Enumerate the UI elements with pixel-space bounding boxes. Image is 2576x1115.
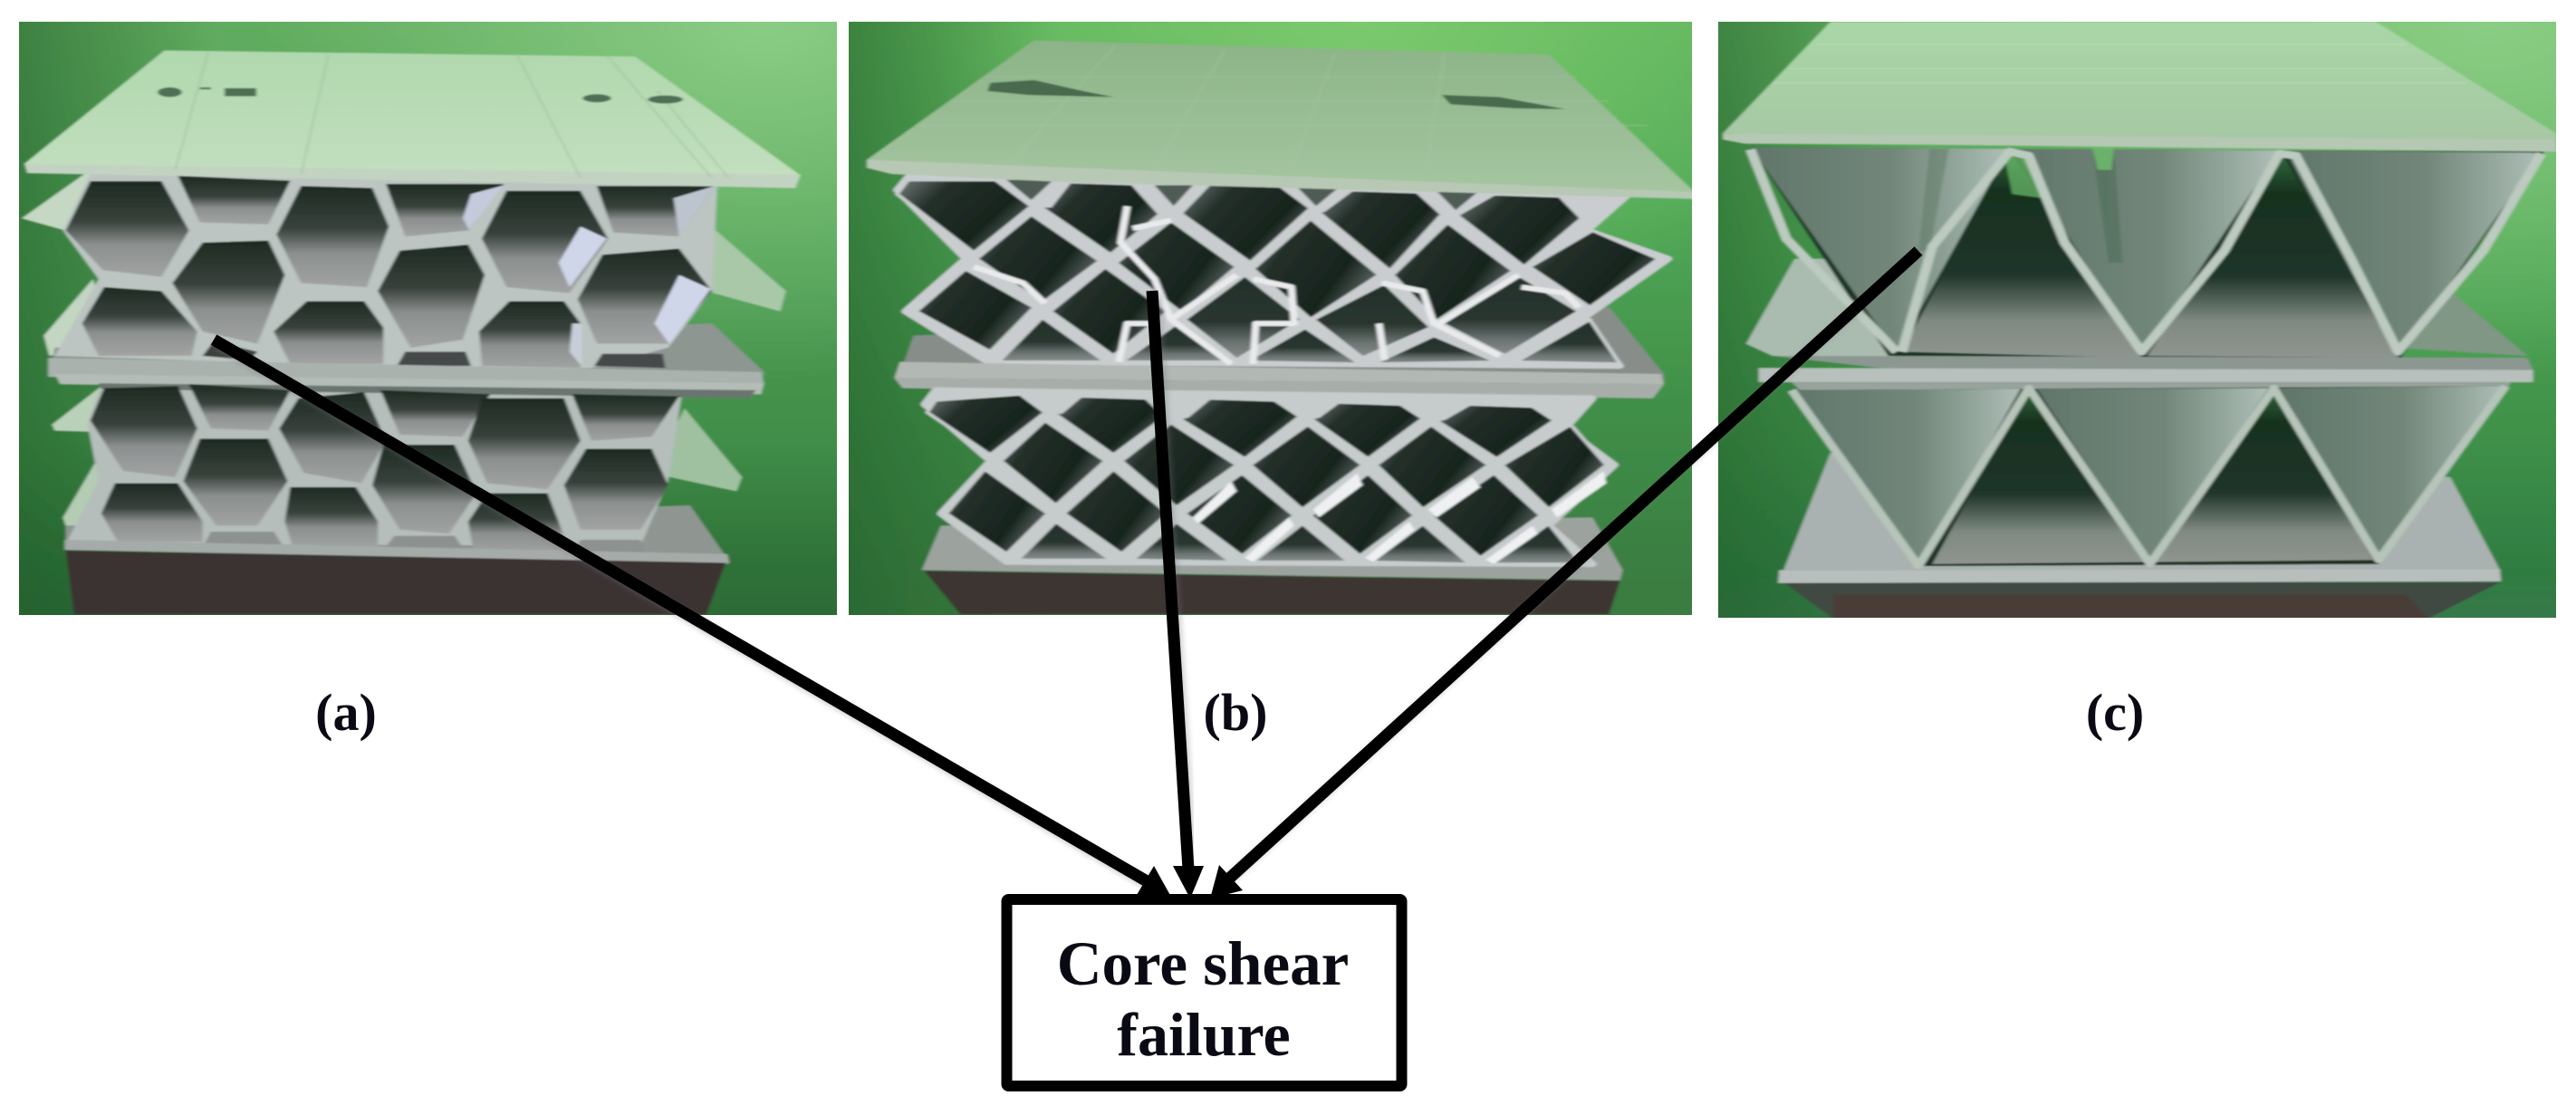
panel: triangular core specimen photo (c)	[1712, 16, 2576, 622]
panel: diamond core specimen photo (b)	[842, 16, 1701, 622]
label: (c): (c)	[2086, 683, 2144, 742]
arrow: from hexagonal core to failure box	[214, 340, 1172, 899]
callout: core shear failure box	[1007, 899, 1402, 1086]
callout: core shear failure box: failure	[1117, 1000, 1291, 1069]
label: (a): (a)	[315, 683, 377, 742]
panel: hexagonal core specimen photo (a)	[11, 16, 849, 622]
callout: core shear failure box: Core shear	[1057, 929, 1349, 998]
arrow: from diamond core to failure box	[1152, 291, 1204, 899]
label: (b): (b)	[1204, 683, 1267, 742]
arrow: from triangular core to failure box	[1210, 251, 1918, 899]
